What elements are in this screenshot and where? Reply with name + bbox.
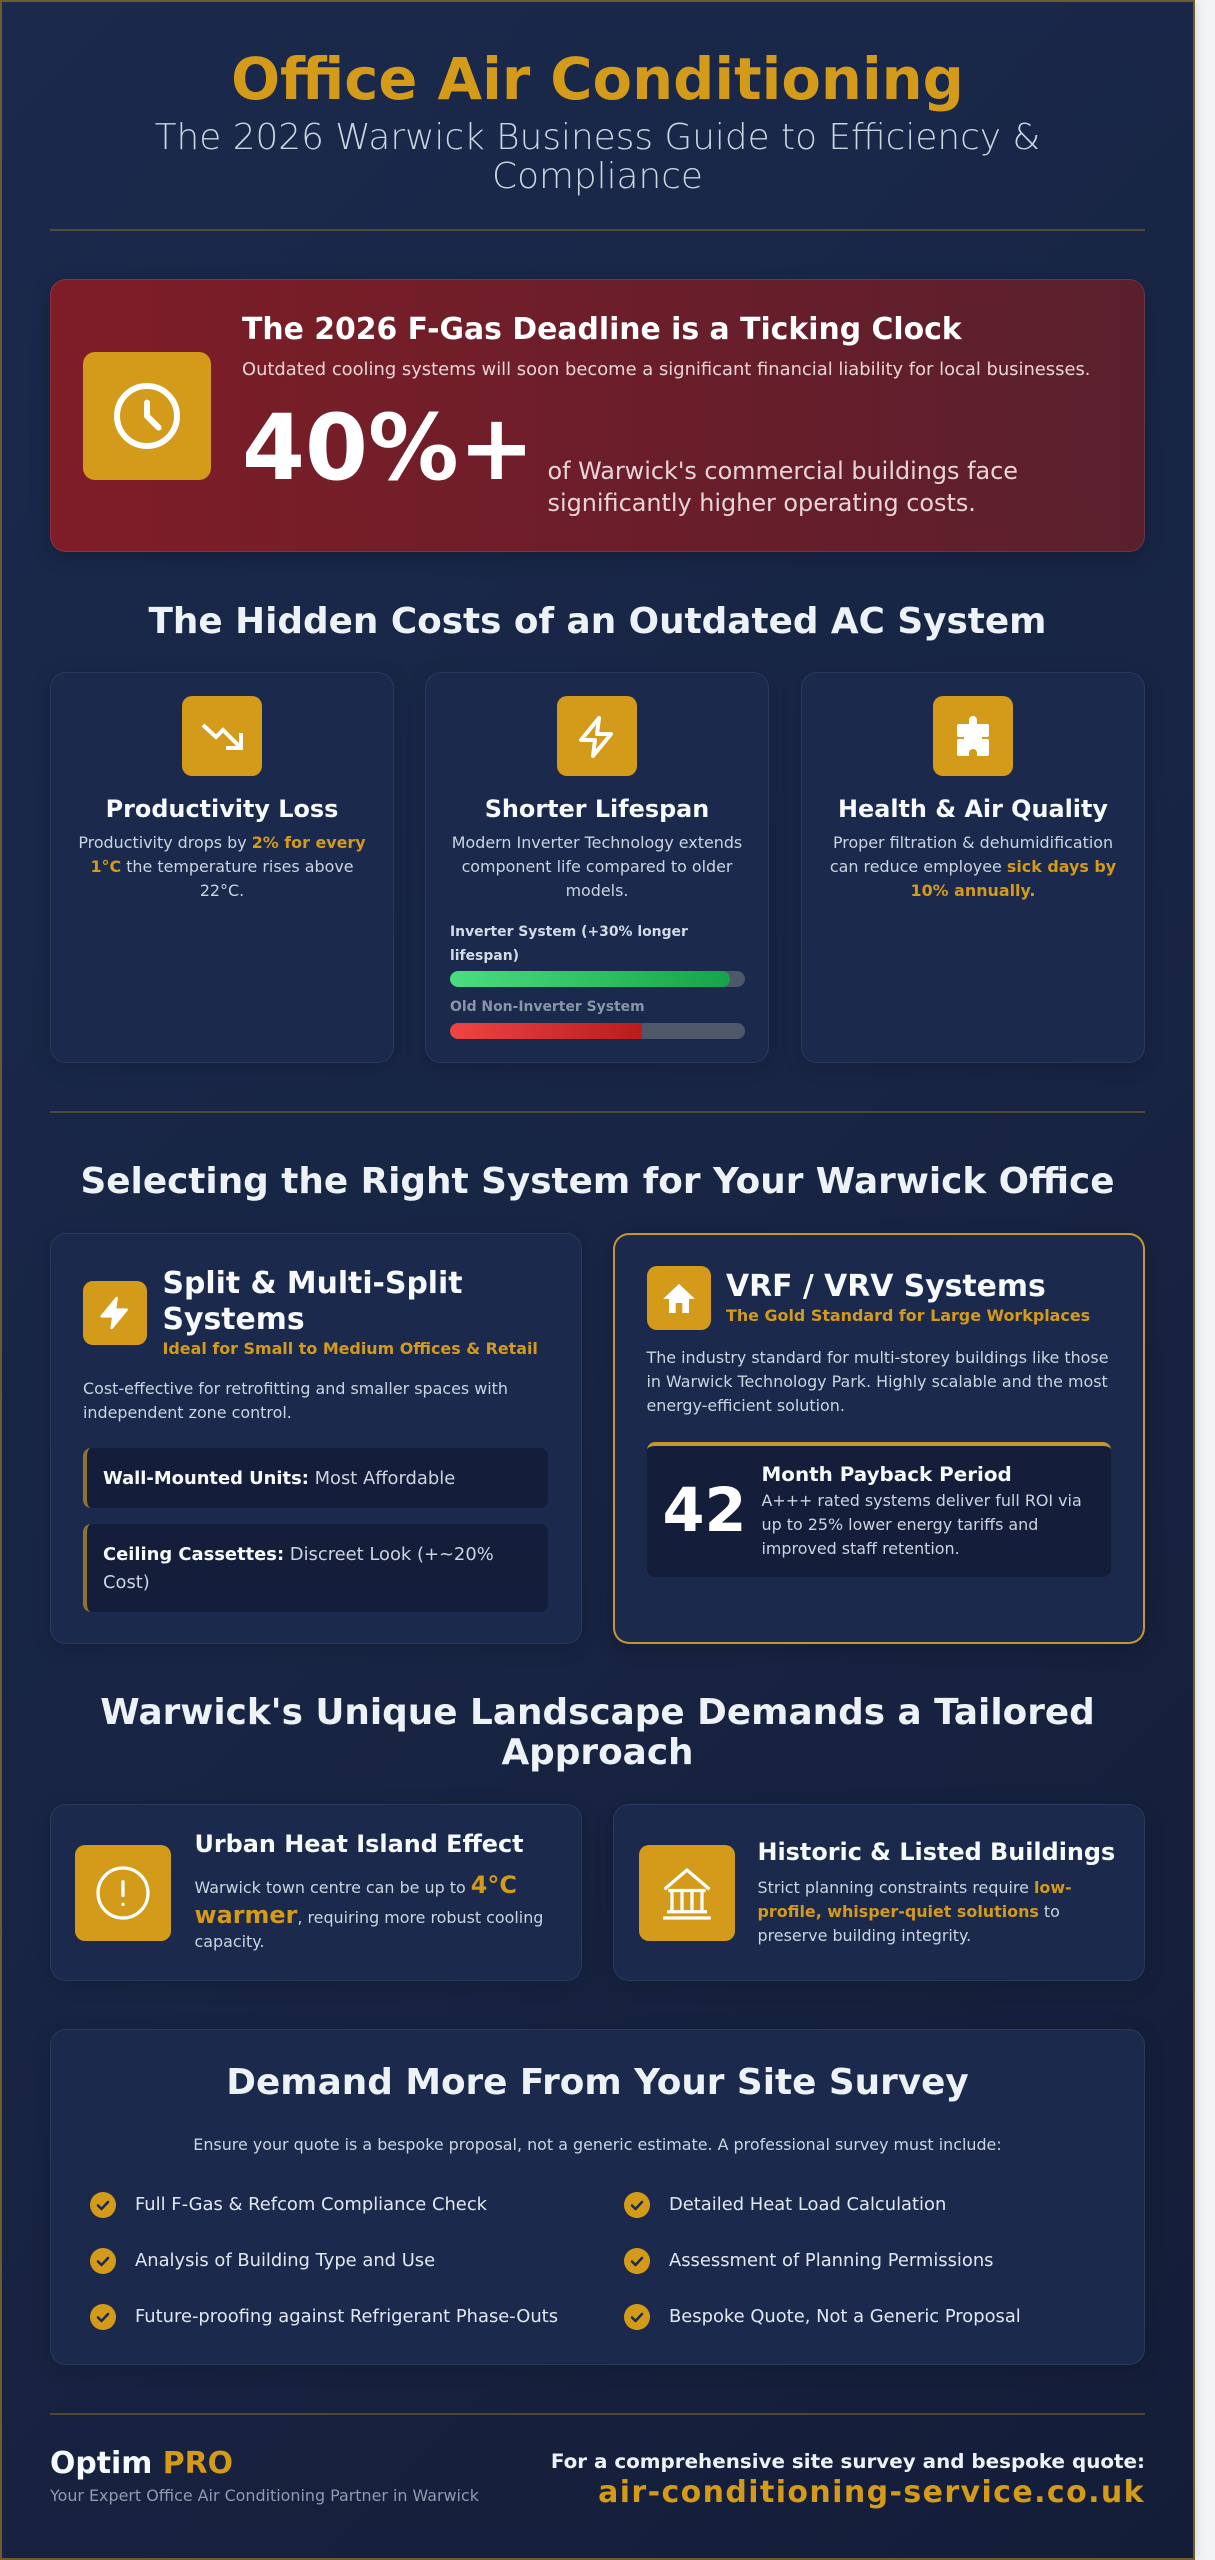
icon: check bbox=[624, 2192, 650, 2218]
alert heading: The 2026 F-Gas Deadline is a Ticking Clock bbox=[242, 312, 962, 347]
option: wall-mounted: Wall-Mounted Units: Most Affordable bbox=[103, 1468, 455, 1489]
checklist item: Bespoke Quote, Not a Generic Proposal bbox=[669, 2306, 1021, 2327]
card text: 22°C. bbox=[200, 881, 244, 900]
title: Office Air Conditioning bbox=[231, 46, 964, 113]
statistic description: significantly higher operating costs. bbox=[548, 489, 976, 517]
card text: Warwick town centre can be up to 4°C bbox=[194, 1871, 517, 1899]
system description: in Warwick Technology Park. Highly scalable and the most bbox=[646, 1372, 1108, 1391]
payback text bbox=[762, 1491, 1082, 1558]
card text: models. bbox=[566, 881, 628, 900]
heading: selecting the right system: Selecting the Right System for Your Warwick Office bbox=[80, 1161, 1115, 1202]
card text: component life compared to older bbox=[462, 857, 732, 876]
system heading: Split & Multi-Split bbox=[162, 1266, 463, 1301]
checklist item: Full F-Gas & Refcom Compliance Check bbox=[135, 2194, 487, 2215]
panel: split and multi-split systems bbox=[50, 1233, 582, 1644]
bar: inverter 95% bbox=[450, 971, 745, 987]
card text: can reduce employee sick days by bbox=[830, 857, 1116, 876]
card text bbox=[830, 833, 1116, 900]
card heading: Urban Heat Island Effect bbox=[194, 1830, 524, 1858]
heading: Warwick landscape: Approach bbox=[501, 1732, 694, 1773]
heading: Warwick landscape bbox=[100, 1692, 1095, 1773]
system description bbox=[83, 1379, 508, 1422]
payback heading: Month Payback Period bbox=[762, 1463, 1012, 1486]
card text bbox=[78, 833, 366, 900]
card heading: Health & Air Quality bbox=[838, 794, 1108, 822]
alert description: Outdated cooling systems will soon become a significant financial liability for local businesses. bbox=[242, 359, 1090, 380]
subtitle bbox=[155, 117, 1040, 197]
card text: 10% annually. bbox=[911, 881, 1035, 900]
statistic description bbox=[548, 457, 1018, 517]
panel intro: Ensure your quote is a bespoke proposal, not a generic estimate. A professional survey must include: bbox=[193, 2135, 1002, 2154]
header bbox=[155, 46, 1040, 197]
icon: puzzle piece bbox=[933, 696, 1013, 776]
checklist item: Future-proofing against Refrigerant Phase-Outs bbox=[135, 2306, 558, 2327]
icon: house bbox=[646, 1266, 710, 1330]
system subheading: Ideal for Small to Medium Offices & Retail bbox=[162, 1339, 538, 1358]
icon: check bbox=[624, 2248, 650, 2274]
icon: solid bolt bbox=[83, 1281, 147, 1345]
system heading: Systems bbox=[162, 1302, 305, 1337]
checklist item bbox=[624, 2192, 946, 2218]
system subheading: The Gold Standard for Large Workplaces bbox=[726, 1306, 1090, 1325]
option: ceiling cassettes: Cost) bbox=[103, 1572, 150, 1593]
payback number: 42 bbox=[662, 1476, 747, 1546]
system description bbox=[646, 1348, 1108, 1415]
payback text: A+++ rated systems deliver full ROI via bbox=[762, 1491, 1082, 1510]
bar label: inverter bbox=[450, 924, 688, 964]
panel: shorter lifespan bbox=[425, 672, 769, 1063]
call to action: For a comprehensive site survey and bespoke quote: bbox=[551, 2450, 1145, 2472]
heading: hidden costs: The Hidden Costs of an Outdated AC System bbox=[149, 600, 1046, 642]
option: ceiling cassettes bbox=[83, 1524, 548, 1612]
subtitle: Compliance bbox=[492, 156, 703, 197]
callout: payback period bbox=[646, 1442, 1110, 1577]
system description: Cost-effective for retrofitting and smaller spaces with bbox=[83, 1379, 508, 1398]
icon: check bbox=[90, 2248, 116, 2274]
logo: Optim PRO bbox=[50, 2446, 233, 2481]
system description: The industry standard for multi-storey buildings like those bbox=[646, 1348, 1108, 1367]
bar: non-inverter 65% bbox=[450, 1023, 745, 1039]
icon: classical building bbox=[638, 1845, 734, 1941]
card text: Strict planning constraints require low- bbox=[758, 1878, 1072, 1897]
subtitle: The 2026 Warwick Business Guide to Efficiency & bbox=[155, 117, 1040, 158]
option: wall-mounted bbox=[83, 1448, 548, 1508]
checklist item: Assessment of Planning Permissions bbox=[669, 2250, 994, 2271]
card text: Modern Inverter Technology extends bbox=[452, 833, 742, 852]
panel: health and air quality bbox=[801, 672, 1145, 1063]
panel: VRF / VRV systems bbox=[613, 1233, 1145, 1644]
icon: check bbox=[90, 2192, 116, 2218]
bar label: inverter: Inverter System (+30% longer bbox=[450, 924, 688, 940]
panel: site survey checklist bbox=[50, 2029, 1145, 2365]
card heading: Historic & Listed Buildings bbox=[758, 1838, 1115, 1866]
heading: Warwick landscape: Warwick's Unique Landscape Demands a Tailored bbox=[100, 1692, 1095, 1733]
card text: profile, whisper-quiet solutions to bbox=[758, 1902, 1060, 1921]
icon: bolt outline bbox=[557, 696, 637, 776]
system heading: VRF / VRV Systems bbox=[726, 1269, 1046, 1304]
icon: check bbox=[90, 2304, 116, 2330]
card text: preserve building integrity. bbox=[758, 1926, 971, 1945]
icon: warning circle bbox=[75, 1845, 171, 1941]
panel: historic and listed buildings bbox=[613, 1804, 1145, 1981]
panel: productivity loss bbox=[50, 672, 394, 1063]
panel heading: Demand More From Your Site Survey bbox=[226, 2062, 969, 2103]
checklist item: Analysis of Building Type and Use bbox=[135, 2250, 435, 2271]
card heading: Productivity Loss bbox=[106, 794, 338, 822]
option: ceiling cassettes: Ceiling Cassettes: Discreet Look (+~20% bbox=[103, 1544, 494, 1565]
footer bbox=[50, 2446, 1145, 2510]
statistic description: of Warwick's commercial buildings face bbox=[548, 457, 1018, 485]
payback text: up to 25% lower energy tariffs and bbox=[762, 1515, 1038, 1534]
panel: F-Gas deadline alert bbox=[50, 279, 1145, 552]
card text bbox=[758, 1878, 1072, 1945]
tagline: Your Expert Office Air Conditioning Partner in Warwick bbox=[50, 2486, 479, 2505]
panel: urban heat island bbox=[50, 1804, 582, 1981]
card heading: Shorter Lifespan bbox=[485, 794, 709, 822]
system description: energy-efficient solution. bbox=[646, 1396, 845, 1415]
card text: 1°C the temperature rises above bbox=[90, 857, 354, 876]
bar label: non-inverter: Old Non-Inverter System bbox=[450, 999, 645, 1015]
system heading bbox=[162, 1266, 463, 1337]
system description: independent zone control. bbox=[83, 1403, 292, 1422]
website: air-conditioning-service.co.uk bbox=[598, 2475, 1145, 2510]
card text bbox=[194, 1871, 543, 1951]
card text: capacity. bbox=[194, 1932, 264, 1951]
payback text: improved staff retention. bbox=[762, 1539, 960, 1558]
big statistic: 40%+ bbox=[242, 396, 534, 501]
checklist item: Detailed Heat Load Calculation bbox=[669, 2194, 946, 2215]
icon: trending down bbox=[182, 696, 262, 776]
icon: clock bbox=[83, 352, 211, 480]
card text bbox=[452, 833, 742, 900]
card text: Productivity drops by 2% for every bbox=[78, 833, 366, 852]
icon: check bbox=[624, 2304, 650, 2330]
bar chart: lifespan comparison bbox=[450, 924, 745, 1039]
card text: warmer, requiring more robust cooling bbox=[194, 1901, 543, 1929]
card text: Proper filtration & dehumidification bbox=[833, 833, 1113, 852]
bar label: inverter: lifespan) bbox=[450, 948, 519, 964]
